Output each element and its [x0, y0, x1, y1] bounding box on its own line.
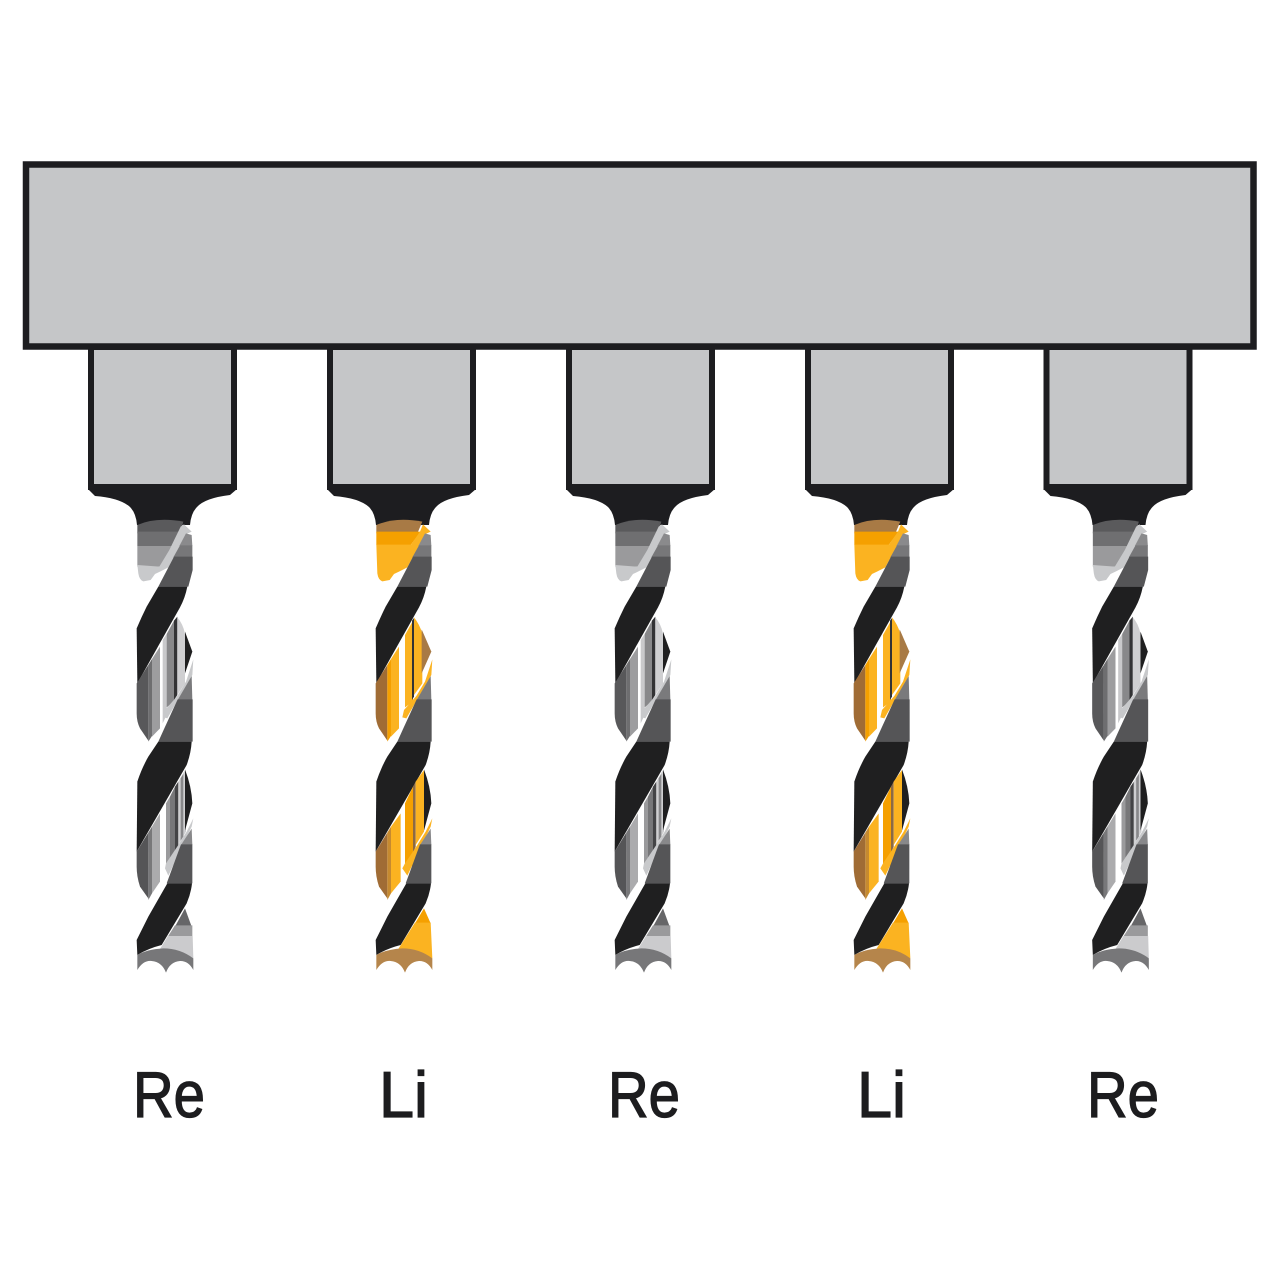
label: Re: Re	[1087, 1058, 1159, 1131]
label: Re: Re	[608, 1058, 680, 1131]
main block	[26, 164, 1254, 346]
spindle 5	[1044, 347, 1192, 525]
drill 2: gold left-hand	[376, 520, 432, 973]
label: Re: Re	[133, 1058, 205, 1131]
spindle 2	[327, 347, 476, 525]
drill 5: grey right-hand	[1092, 520, 1149, 973]
spindle 4	[805, 347, 954, 525]
drill 1: grey right-hand	[137, 520, 193, 973]
drill 4: gold left-hand	[854, 520, 910, 973]
spindle 3	[566, 347, 715, 525]
label: Li: Li	[857, 1058, 906, 1131]
spindle 1	[88, 347, 237, 525]
label: Li: Li	[379, 1058, 428, 1131]
drill 3: grey right-hand	[615, 520, 671, 973]
